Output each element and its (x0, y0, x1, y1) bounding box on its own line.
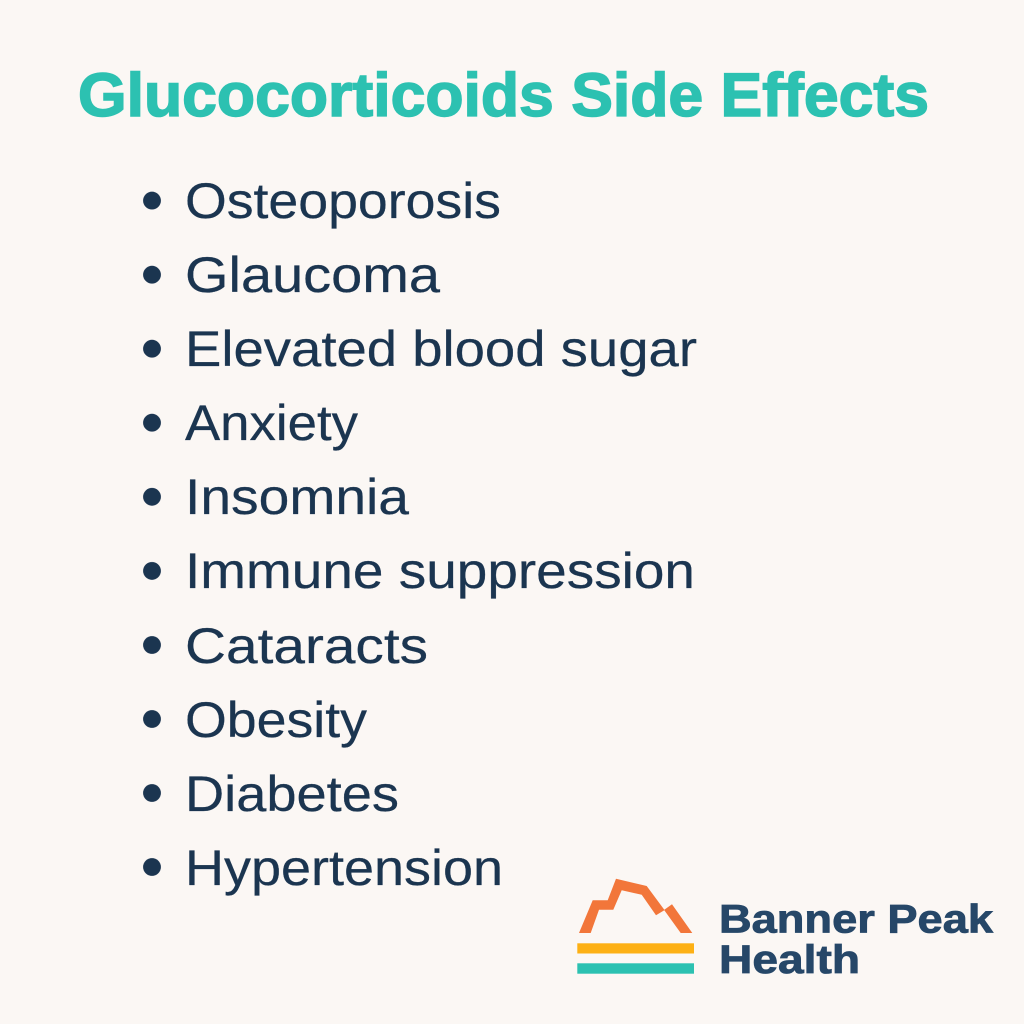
list item: Hypertension: Hypertension (185, 840, 503, 896)
side effects list (143, 173, 697, 896)
logo wordmark (719, 898, 994, 982)
list item: Glaucoma: Glaucoma (185, 247, 440, 303)
list item: Anxiety: Anxiety (185, 395, 358, 451)
logo wordmark: Health (719, 938, 860, 982)
list item: Diabetes: Diabetes (185, 766, 399, 822)
title: Glucocorticoids Side Effects (78, 61, 929, 129)
list item: Immune suppression: Immune suppression (185, 543, 695, 599)
list item: Obesity: Obesity (185, 692, 367, 748)
icon: teal bar (577, 963, 694, 974)
list item: Osteoporosis: Osteoporosis (185, 173, 501, 229)
list item: Insomnia: Insomnia (185, 469, 409, 525)
logo wordmark: Banner Peak (719, 898, 994, 942)
list item: Elevated blood sugar: Elevated blood sugar (185, 321, 697, 377)
list item: Cataracts: Cataracts (185, 618, 428, 674)
icon: mountain peak (579, 879, 692, 933)
logo: Banner Peak Health (577, 879, 994, 982)
icon: yellow bar (577, 943, 694, 954)
